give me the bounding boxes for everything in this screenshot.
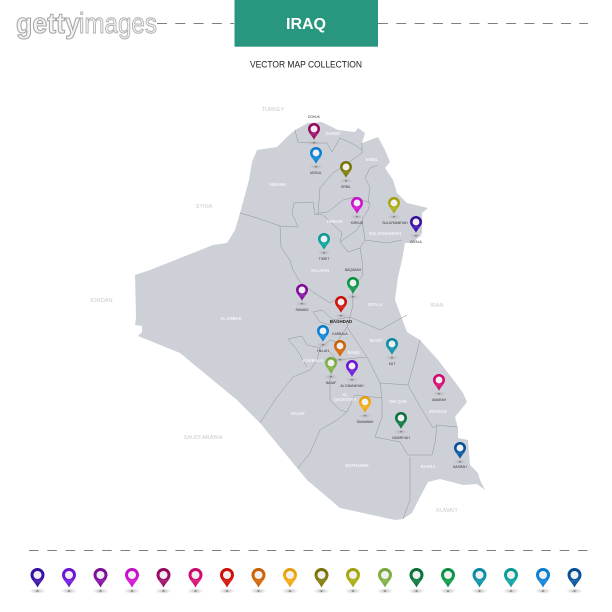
region labels: BASRA <box>421 464 435 469</box>
pin: Ramadi <box>295 284 309 312</box>
pin: Nasiriyah: NASIRIYAH <box>392 436 410 440</box>
pin: Samawah: SAMAWAH <box>357 420 374 424</box>
pin: Nasiriyah <box>392 412 410 440</box>
region labels: DIYALA <box>368 302 382 307</box>
pin: Basrah: BASRAH <box>453 465 467 469</box>
pin: Mosul <box>309 147 323 175</box>
region labels: KARBALA <box>303 358 323 363</box>
region labels: MAYSAN <box>429 409 447 414</box>
map outline <box>135 122 485 520</box>
pin: Diyala <box>409 216 423 244</box>
pin: Sulaymaniyah <box>382 197 408 225</box>
region labels: KIRKUK <box>327 219 343 224</box>
country labels: SYRIA <box>196 204 213 210</box>
pin: Amarah: AMARAH <box>432 398 447 402</box>
pin: Al Diwaniyah <box>340 360 364 388</box>
region labels: DHI QAR <box>389 399 407 404</box>
watermark logo: getty <box>16 8 80 40</box>
region labels: QADISIYAH <box>334 397 356 402</box>
region labels: NAJAF <box>291 411 305 416</box>
region labels: WASIT <box>370 338 383 343</box>
region labels: MUTHANNA <box>345 463 369 468</box>
watermark logo <box>16 8 157 40</box>
map: Iraq <box>90 107 485 520</box>
pin: Dohuk <box>307 115 321 145</box>
pin: Baqubah <box>345 268 362 299</box>
country labels: KUWAIT <box>436 508 458 514</box>
region labels: AL ANBAR <box>220 316 242 321</box>
pin: Diyala: DIYALA <box>410 240 423 244</box>
region labels: SULAYMANIYAH <box>369 231 401 236</box>
region labels: AL <box>342 392 348 397</box>
region labels: NINAWA <box>270 182 286 187</box>
region borders <box>240 130 457 519</box>
country labels: JORDAN <box>90 298 112 304</box>
pin: Erbil <box>339 161 353 189</box>
bottom dashed line <box>29 550 588 552</box>
region labels: ERBIL <box>366 157 379 162</box>
pin: Kut: KUT <box>389 362 395 366</box>
subtitle: VECTOR MAP COLLECTION <box>250 60 362 70</box>
country labels: TURKEY <box>262 107 285 113</box>
pin colour row <box>29 568 583 594</box>
title banner <box>234 0 378 47</box>
pin: Hillah <box>316 325 330 353</box>
watermark logo: images <box>79 8 157 40</box>
pin: Al Diwaniyah: AL DIWANIYAH <box>340 384 364 388</box>
country labels: SAUDI ARABIA <box>184 435 223 441</box>
pin: Baqubah: BAQUBAH <box>345 268 362 272</box>
region labels: SALADIN <box>311 268 329 273</box>
pin: Kut <box>385 338 399 366</box>
region labels: BABIL <box>348 350 361 355</box>
pin: Babil <box>333 340 347 362</box>
region labels <box>220 131 447 469</box>
pin: Dohuk: DOHUK <box>308 115 321 119</box>
country labels <box>90 107 458 514</box>
top dashed line <box>157 22 588 24</box>
region labels: DAHUK <box>326 131 340 136</box>
pin: Hillah: HILLAH <box>317 349 329 353</box>
pin: Najaf: NAJAF <box>326 381 336 385</box>
pin: Basrah <box>453 442 467 469</box>
pin: Tikrit: TIKRIT <box>319 257 329 261</box>
pin: Sulaymaniyah: SULAYMANIYAH <box>382 221 408 225</box>
pin: Samawah <box>357 396 374 424</box>
pin: Erbil: ERBIL <box>341 185 351 189</box>
pin: Kirkuk <box>350 197 364 225</box>
pin: Mosul: MOSUL <box>310 171 322 175</box>
pin: Ramadi: RAMADI <box>296 308 308 312</box>
pin: Amarah <box>432 374 447 402</box>
pin: Kirkuk: KIRKUK <box>351 221 364 225</box>
label: Karbala: KARBALA <box>332 332 348 336</box>
pin: Baghdad: BAGHDAD <box>330 319 352 324</box>
pin: Najaf <box>324 357 338 385</box>
title banner: IRAQ <box>286 16 326 33</box>
pin: Tikrit <box>317 233 331 261</box>
pin: Baghdad <box>330 296 352 324</box>
country labels: IRAN <box>430 303 444 309</box>
